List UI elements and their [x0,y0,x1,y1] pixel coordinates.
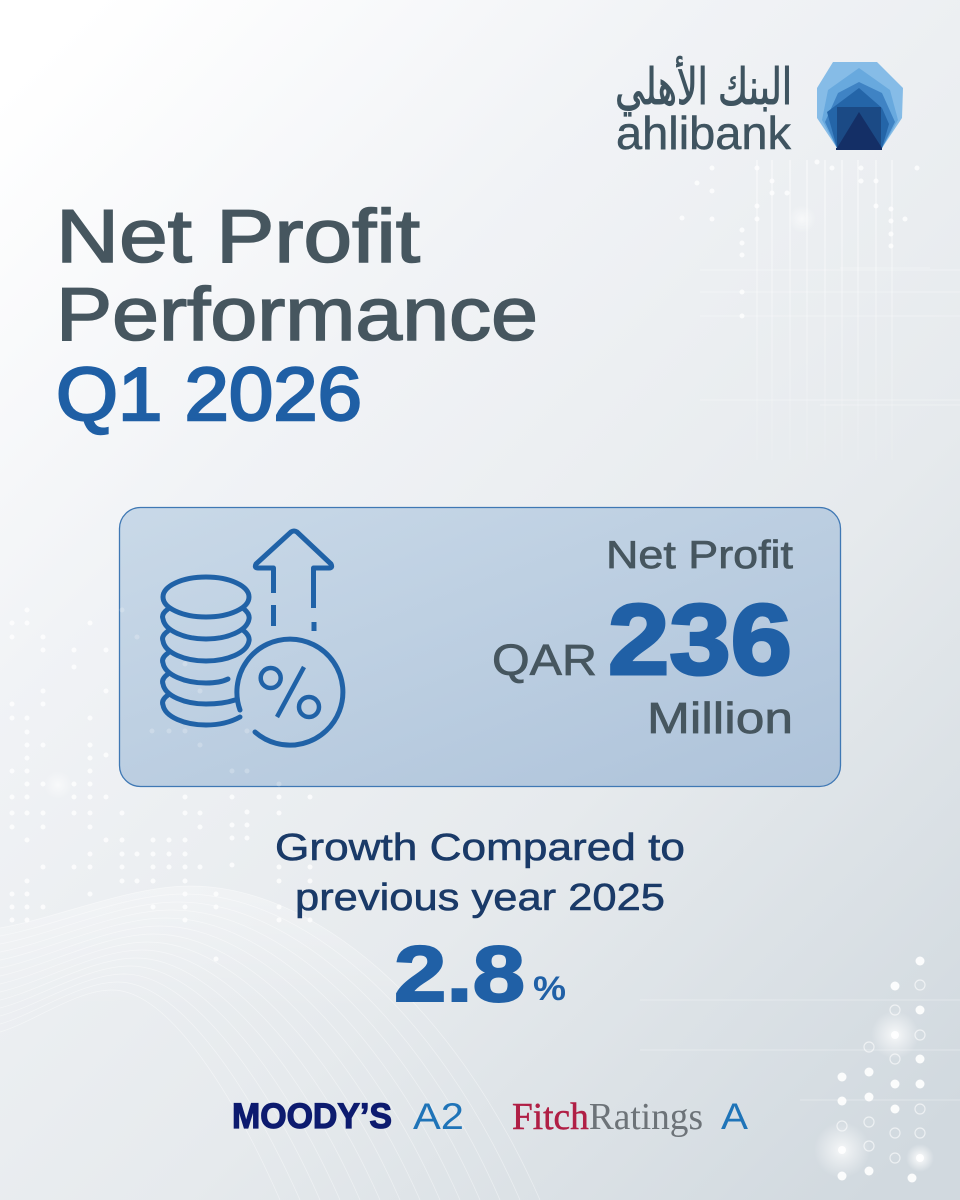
label: QAR: QAR [492,636,597,685]
title line: Net Profit: Net Profit [56,194,420,278]
icon: percent sign [261,667,319,717]
growth line 2: previous year 2025 [295,877,665,919]
background dots [12,162,917,959]
logo: ahlibank [615,55,903,159]
bottom-right dot cluster [837,956,925,1182]
icon: percent coin [237,639,343,745]
growth percent sign: % [533,970,566,1008]
label: Net Profit: Net Profit [606,534,793,577]
panel: net profit [120,508,840,786]
icon: coin stack [163,577,249,725]
logo arabic wordmark: البنك الأهلي [615,55,792,117]
Fitch Ratings logo text: FitchRatings [512,1096,703,1138]
soft glows [44,205,934,1178]
ratings [232,1096,748,1138]
panel background [120,508,840,786]
wave mesh [0,886,540,1200]
panel faint dots [122,610,279,784]
Fitch rating: A [721,1096,748,1137]
title line: Q1 2026: Q1 2026 [56,352,362,436]
growth line 1: Growth Compared to [275,827,685,869]
growth text [275,827,685,1018]
logo latin wordmark: ahlibank [616,107,792,159]
icon: coins, percent and up arrow [163,531,343,745]
Moody's logo text: MOODY’S [232,1097,392,1136]
logo emblem [817,62,903,150]
value: 236: 236 [608,584,792,696]
label: Million: Million [647,694,793,743]
background circuit lines [640,160,960,1100]
growth value: 2.8 [394,929,525,1018]
title line: Performance: Performance [56,272,538,356]
Moody's rating: A2 [413,1096,464,1137]
icon: arrow dash [312,622,316,631]
icon: arrow [255,531,332,626]
title [56,194,538,436]
